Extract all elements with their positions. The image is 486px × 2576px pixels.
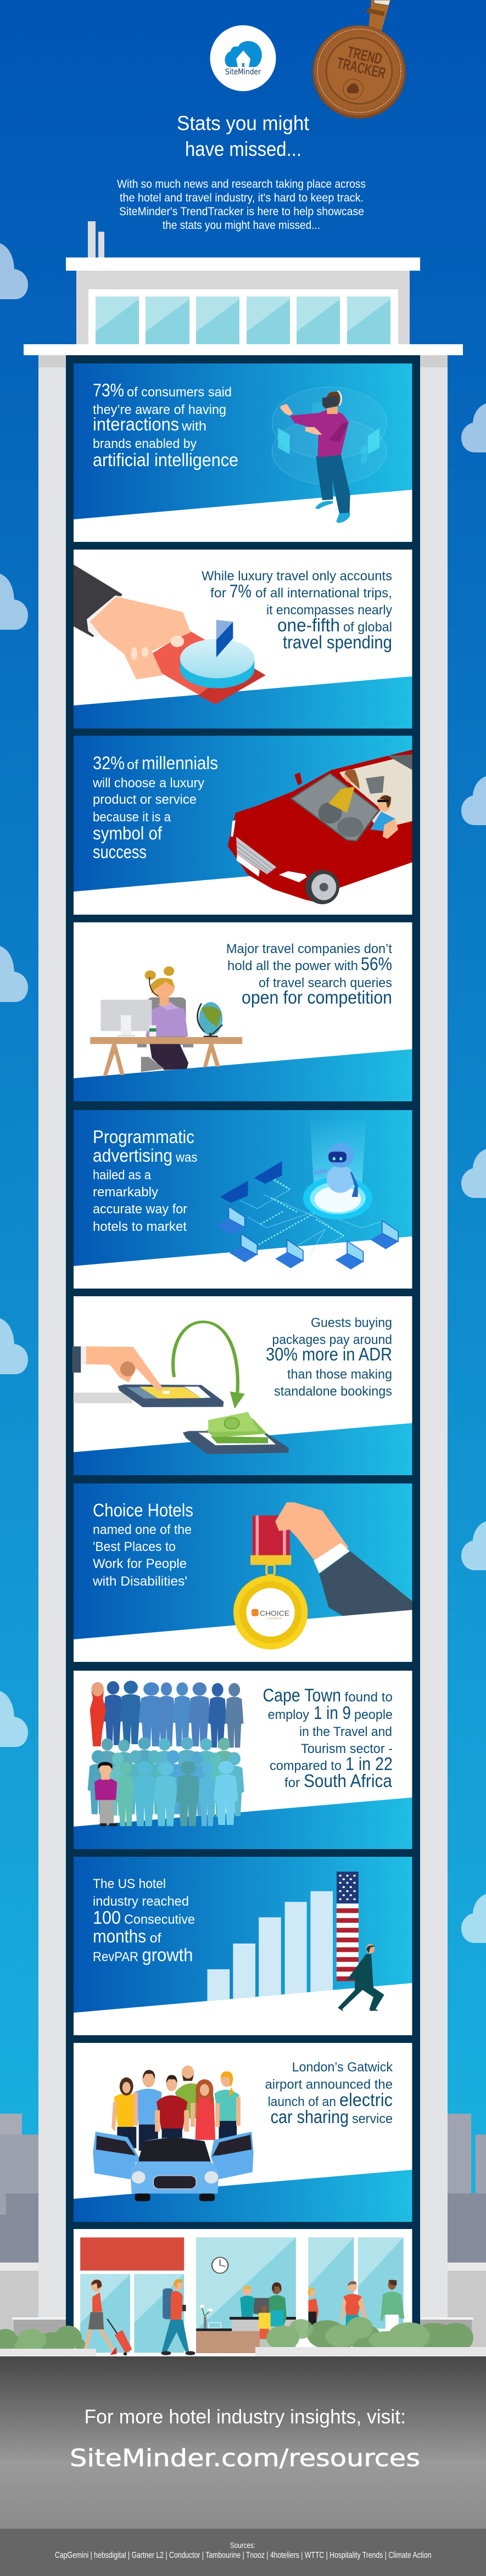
people: woman with suitcase bbox=[79, 2279, 132, 2356]
stat text: Choice Hotels: 'Best Places to bbox=[93, 1539, 176, 1554]
stat text: 32% of millennials: symbol of bbox=[93, 823, 163, 843]
intro text bbox=[117, 178, 366, 232]
stat text: Cape Town 1 in 9: found to bbox=[345, 1690, 393, 1705]
stat text: 73% of consumers bbox=[93, 380, 238, 470]
illustration: people around blue car bbox=[93, 2065, 254, 2201]
stat text: 32% of millennials: millennials bbox=[142, 753, 218, 773]
title bbox=[177, 112, 310, 160]
panel 10: Gatwick bbox=[74, 2043, 412, 2222]
stat text: Cape Town 1 in 9: people bbox=[354, 1707, 393, 1722]
stat text: Gatwick electric car sharing: airport announced the bbox=[265, 2077, 393, 2092]
entrance ledges bbox=[12, 2317, 473, 2342]
panel 1: AI interactions bbox=[74, 363, 412, 542]
luggage tag: TrendTracker: TRACKER bbox=[336, 54, 387, 82]
stat text: luxury travel bbox=[202, 569, 393, 652]
stat text: luxury travel: one-fifth bbox=[277, 615, 340, 635]
stat text: 100 consecutive months: The US hotel bbox=[93, 1877, 166, 1891]
illustration: hand tapping phone, arrow, money bbox=[72, 1322, 289, 1454]
city skyline bbox=[0, 2114, 486, 2350]
luggage tag: TrendTracker bbox=[312, 0, 406, 119]
panel 5: programmatic advertising bbox=[74, 1110, 412, 1289]
stat text: Cape Town 1 in 9 bbox=[262, 1685, 393, 1791]
stat text: 56% of travel search: open for competition bbox=[242, 987, 392, 1007]
link text: SiteMinder resources: SiteMinder.com/resources bbox=[70, 2444, 420, 2472]
intro text: the hotel and travel industry, it's hard to keep track. bbox=[120, 192, 364, 204]
stat text: 56% of travel search: 56% bbox=[361, 954, 392, 974]
stat text: luxury travel: 7% bbox=[230, 581, 252, 601]
stat text: Cape Town 1 in 9: in the Travel and bbox=[299, 1724, 392, 1739]
stat text: 100 consecutive months bbox=[93, 1877, 195, 1965]
shrubs bbox=[0, 2317, 473, 2353]
illustration: hand holding medal: CHOICE bbox=[260, 1609, 289, 1617]
illustration: red convertible bbox=[228, 750, 412, 904]
people: backpacker bbox=[161, 2279, 195, 2355]
stat text: 30% more in ADR: than those making bbox=[287, 1367, 392, 1382]
people: blonde woman bbox=[308, 2287, 319, 2328]
stat text: Cape Town 1 in 9: South Africa bbox=[304, 1771, 393, 1791]
stat text: 73% of consumers: interactions bbox=[93, 414, 179, 434]
stat text: Gatwick electric car sharing: service bbox=[352, 2112, 393, 2126]
bar chart: rising bars with US flag bbox=[208, 1872, 384, 2012]
stat text: 32% of millennials: of bbox=[127, 758, 138, 772]
stat text: 32% of millennials: success bbox=[93, 842, 147, 862]
stat text: 56% of travel search: Major travel companies don’t bbox=[226, 942, 392, 956]
icon: US flag column bbox=[337, 1872, 359, 1981]
logo: SiteMinder bbox=[210, 25, 276, 91]
hotel roof bbox=[66, 221, 420, 344]
stat text: programmatic advertising: Programmatic bbox=[93, 1127, 194, 1147]
intro text: With so much news and research taking place across bbox=[117, 178, 366, 191]
illustration: lobby entrance with guests and staff bbox=[79, 2237, 404, 2356]
stat text: Cape Town 1 in 9: Tourism sector - bbox=[301, 1741, 393, 1756]
stat text: 73% of consumers: brands enabled by bbox=[93, 436, 197, 451]
stat text: 32% of millennials: product or service bbox=[93, 792, 197, 807]
stat text: luxury travel: of all international trips, bbox=[255, 586, 392, 601]
panel 9: US RevPAR bbox=[74, 1857, 412, 2035]
people: man in green jumper bbox=[381, 2280, 404, 2329]
panel 11: hotel lobby bbox=[74, 2229, 412, 2356]
stat text: 56% of travel search: of travel search queries bbox=[259, 976, 392, 990]
panel 4: open for competition bbox=[74, 922, 412, 1101]
stat text: Choice Hotels: with Disabilities' bbox=[92, 1574, 187, 1589]
stat text: Choice Hotels bbox=[92, 1500, 193, 1589]
stat text: Cape Town 1 in 9: 1 in 22 bbox=[345, 1754, 393, 1774]
luggage tag: TrendTracker: TREND bbox=[346, 43, 384, 68]
stat text: programmatic advertising: accurate way for bbox=[93, 1202, 187, 1217]
stat text: 32% of millennials bbox=[92, 753, 218, 862]
stat text: programmatic advertising: was bbox=[175, 1150, 198, 1165]
stat text: 30% more in ADR: packages pay around bbox=[272, 1332, 392, 1347]
footer sources: Sources: bbox=[230, 2541, 255, 2550]
stat text: 73% of consumers: they’re aware of having bbox=[93, 402, 226, 417]
stat text: 100 consecutive months: of bbox=[150, 1931, 161, 1946]
panel 7: Choice Hotels bbox=[74, 1483, 412, 1662]
panel 8: Cape Town bbox=[74, 1671, 412, 1849]
stat text: 100 consecutive months: RevPAR bbox=[93, 1950, 138, 1964]
icon: wall clock bbox=[212, 2258, 228, 2273]
stat text: Cape Town 1 in 9: for bbox=[284, 1776, 300, 1790]
stat text: luxury travel: travel spending bbox=[283, 632, 392, 652]
illustration: robot and networked laptops bbox=[217, 1119, 398, 1269]
stat text: 73% of consumers: with bbox=[181, 419, 206, 434]
person: woman, red dress bbox=[191, 2079, 220, 2140]
person: woman, yellow shirt bbox=[111, 2077, 136, 2148]
stat text: programmatic advertising: hailed as a bbox=[93, 1168, 151, 1183]
panel 6: packages ADR bbox=[72, 1296, 412, 1475]
stat text: luxury travel: for bbox=[210, 586, 226, 601]
stat text: luxury travel: it encompasses nearly bbox=[266, 603, 393, 618]
stat text: Cape Town 1 in 9: compared to bbox=[270, 1759, 342, 1773]
pavement bbox=[0, 2347, 486, 2356]
title: have missed... bbox=[185, 138, 301, 160]
stat text: Cape Town 1 in 9: employ bbox=[268, 1707, 310, 1722]
stat text: 30% more in ADR: standalone bookings bbox=[274, 1384, 392, 1399]
heading: more insights: For more hotel industry insights, visit: bbox=[85, 2405, 406, 2428]
person: woman, teal shirt bbox=[214, 2071, 241, 2147]
stat text: luxury travel: While luxury travel only accounts bbox=[202, 569, 392, 584]
people: woman in green at desk bbox=[269, 2282, 287, 2327]
person: bald man, green shirt bbox=[175, 2065, 200, 2119]
stat text: 100 consecutive months: months bbox=[93, 1926, 146, 1946]
stat text: programmatic advertising bbox=[93, 1127, 198, 1234]
stat text: Choice Hotels: Work for People bbox=[93, 1556, 187, 1571]
person: man, blue shirt bbox=[133, 2070, 162, 2151]
stat text: 73% of consumers: 73% bbox=[93, 380, 124, 400]
stat text: Gatwick electric car sharing: electric bbox=[339, 2090, 393, 2110]
stat text: 73% of consumers: artificial intelligence bbox=[93, 450, 238, 470]
stat text: 100 consecutive months: industry reached bbox=[93, 1894, 189, 1909]
title: Stats you might bbox=[177, 112, 310, 135]
footer call to action bbox=[0, 2356, 486, 2529]
stat text: Gatwick electric car sharing: launch of an bbox=[268, 2095, 336, 2109]
stat text: Choice Hotels: Choice Hotels bbox=[93, 1500, 193, 1520]
people: man in orange shirt bbox=[340, 2281, 367, 2327]
stat text: luxury travel: of global bbox=[343, 620, 392, 635]
stat text: programmatic advertising: hotels to market bbox=[93, 1219, 187, 1234]
illustration: businessman pushing flag bbox=[338, 1944, 384, 2012]
footer sources bbox=[0, 2529, 486, 2576]
stat text: 32% of millennials: will choose a luxury bbox=[92, 776, 205, 791]
stat text: Cape Town 1 in 9: 1 in 9 bbox=[314, 1703, 351, 1723]
intro text: SiteMinder's TrendTracker is here to help showcase bbox=[119, 205, 364, 218]
stat text: 30% more in ADR: Guests buying bbox=[311, 1315, 392, 1330]
illustration: hand holding medal bbox=[233, 1502, 412, 1649]
hotel tower body bbox=[24, 344, 463, 2356]
illustration: crowd of people bbox=[88, 1681, 244, 1826]
stat text: Choice Hotels: named one of the bbox=[93, 1522, 192, 1537]
stat text: 30% more in ADR: 30% more in ADR bbox=[266, 1344, 392, 1364]
stat text: 32% of millennials: 32% bbox=[93, 753, 125, 773]
stat text: Gatwick electric car sharing: London’s Gatwick bbox=[292, 2060, 393, 2075]
stat text: 56% of travel search: hold all the power with bbox=[227, 959, 358, 973]
logo: SiteMinder: SiteMinder bbox=[225, 68, 261, 77]
stat text: Cape Town 1 in 9: Cape Town bbox=[262, 1685, 341, 1705]
stat text: programmatic advertising: advertising bbox=[93, 1145, 172, 1166]
people: receptionist bbox=[240, 2286, 255, 2317]
illustration: hand holding medal: HOTELS bbox=[267, 1617, 282, 1620]
stat text: Gatwick electric car sharing bbox=[265, 2060, 393, 2127]
stat text: 100 consecutive months: growth bbox=[142, 1945, 193, 1965]
icon: blue car with open doors bbox=[93, 2132, 254, 2201]
stat text: programmatic advertising: remarkably bbox=[93, 1185, 159, 1200]
stat text: 73% of consumers: of consumers said bbox=[127, 385, 232, 400]
stat text: Gatwick electric car sharing: car sharing bbox=[271, 2107, 349, 2127]
reception desk bbox=[196, 2298, 296, 2353]
clouds bbox=[0, 243, 486, 1943]
panel 3: millennials bbox=[74, 736, 412, 915]
stat text: 56% of travel search bbox=[226, 942, 392, 1007]
stat text: 30% more in ADR bbox=[266, 1315, 392, 1399]
stat text: 100 consecutive months: 100 bbox=[93, 1907, 121, 1928]
person: man, red shirt bbox=[155, 2075, 189, 2148]
stat text: 100 consecutive months: Consecutive bbox=[124, 1912, 195, 1927]
illustration: woman at desk with globe bbox=[90, 966, 242, 1077]
people: child bbox=[259, 2305, 271, 2347]
illustration: person in VR headset bbox=[272, 387, 387, 523]
intro text: the stats you might have missed... bbox=[163, 219, 320, 232]
panel 2: luxury travel bbox=[74, 550, 412, 729]
illustration: hand with credit card and pie chart bbox=[74, 564, 266, 704]
stat text: 32% of millennials: because it is a bbox=[93, 810, 171, 825]
